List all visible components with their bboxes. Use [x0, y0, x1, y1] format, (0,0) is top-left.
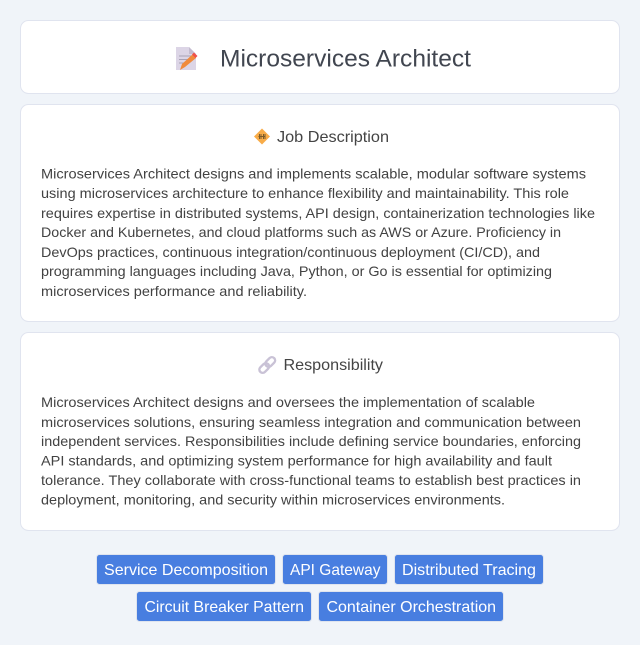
icon: diamond sign — [254, 128, 270, 144]
tag: circuit breaker pattern: Circuit Breaker Pattern — [144, 599, 304, 616]
responsibility text: tolerance. They collaborate with cross-functional teams to establish best practices in — [41, 472, 581, 488]
title text: Microservices Architect — [220, 46, 471, 72]
icon: link — [258, 356, 276, 374]
tag: api gateway: API Gateway — [290, 562, 380, 579]
tag: distributed tracing: Distributed Tracing — [402, 562, 536, 579]
job description text: programming languages including Java, Python, or Go is essential for optimizing — [41, 263, 552, 279]
tag: container orchestration — [318, 592, 504, 622]
heading: responsibility: Responsibility — [284, 357, 383, 374]
responsibility text — [41, 394, 581, 508]
responsibility text: independent services. Responsibilities include defining service boundaries, enforcing — [41, 433, 581, 449]
panel: responsibility — [20, 332, 620, 530]
tag: service decomposition: Service Decomposition — [104, 562, 268, 579]
panel: job description — [20, 104, 620, 322]
panel: title — [20, 20, 620, 94]
job description text: Docker and Kubernetes, and cloud platforms such as AWS or Azure. Proficiency in — [41, 224, 561, 240]
heading: job description: Job Description — [277, 129, 389, 146]
responsibility text: Microservices Architect designs and oversees the implementation of scalable — [41, 394, 535, 410]
job description text: DevOps practices, continuous integration/continuous deployment (CI/CD), and — [41, 244, 540, 260]
tag: circuit breaker pattern — [136, 592, 312, 622]
job description text — [41, 166, 595, 299]
tag: container orchestration: Container Orchestration — [326, 599, 496, 616]
responsibility text: deployment, monitoring, and security within microservices environments. — [41, 492, 505, 508]
tag: service decomposition — [96, 554, 276, 584]
job description text: using microservices architecture to enhance flexibility and maintainability. This role — [41, 185, 569, 201]
tag: distributed tracing — [394, 554, 544, 584]
job description text: Microservices Architect designs and implements scalable, modular software systems — [41, 166, 586, 182]
job description text: microservices performance and reliability. — [41, 283, 307, 299]
responsibility text: microservices solutions, ensuring seamless integration and communication between — [41, 414, 581, 430]
tag: api gateway — [282, 554, 388, 584]
job description text: requires expertise in distributed systems, API design, containerization technologies like — [41, 205, 595, 221]
responsibility text: API standards, and optimizing system performance for high availability and fault — [41, 452, 552, 468]
icon: document with pencil — [176, 47, 198, 70]
